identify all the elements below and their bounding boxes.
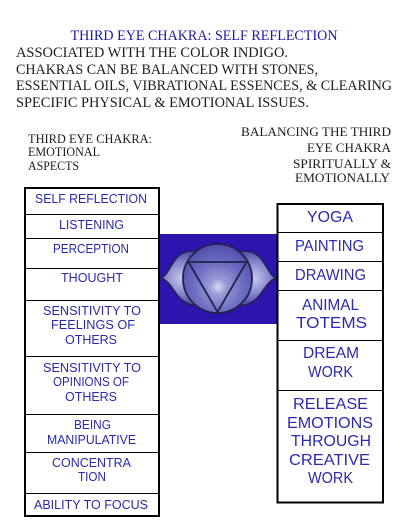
table labels: OTHERS [65,390,117,404]
heading: balancing the third eye chakra: EMOTIONALLY [295,170,391,185]
table labels: RELEASE [293,396,368,413]
indigo panel with third eye chakra symbol [160,234,277,324]
heading: emotional aspects: ASPECTS [28,159,79,173]
heading: balancing the third eye chakra: BALANCING THE THIRD [241,124,391,139]
table labels: WORK [308,470,353,487]
intro text block [16,45,392,111]
icon: left petal [161,251,203,305]
table labels: FEELINGS OF [51,318,135,332]
icon: right petal [234,251,276,305]
heading: balancing the third eye chakra: EYE CHAKRA [307,140,392,155]
icon: central circle [183,244,252,313]
table labels: ABILITY TO FOCUS [34,498,148,512]
table labels: TOTEMS [296,315,367,332]
table labels: PERCEPTION [53,242,129,256]
table labels: SELF REFLECTION [35,192,147,206]
table labels: TION [78,470,106,484]
title: THIRD EYE CHAKRA: SELF REFLECTION [70,28,338,44]
table labels: MANIPULATIVE [47,433,136,447]
heading: balancing the third eye chakra [241,124,392,185]
table labels: OPINIONS OF [53,375,129,389]
table labels: OTHERS [65,333,117,347]
table frame and rows [277,204,383,502]
table labels: DRAWING [295,267,366,284]
table labels: SENSITIVITY TO [43,361,141,375]
heading: emotional aspects [28,132,152,173]
intro text block: ASSOCIATED WITH THE COLOR INDIGO. [16,45,288,61]
table labels: SENSITIVITY TO [43,304,141,318]
table labels: YOGA [307,209,353,226]
table labels: WORK [308,364,353,381]
table frame and rows [25,188,159,516]
heading: emotional aspects: EMOTIONAL [28,145,100,159]
table labels: ANIMAL [302,297,359,314]
heading: emotional aspects: THIRD EYE CHAKRA: [28,132,152,146]
intro text block: CHAKRAS CAN BE BALANCED WITH STONES, [16,62,318,78]
table labels [287,209,373,487]
panel: balancing practices table [277,204,383,502]
heading: balancing the third eye chakra: SPIRITUALLY & [293,156,391,171]
table labels: DREAM [303,345,359,362]
icon: inverted triangle [188,262,246,312]
table labels: PAINTING [295,238,364,255]
table labels: LISTENING [59,218,124,232]
table labels: EMOTIONS [287,415,373,432]
table labels: THROUGH [291,433,371,450]
panel: emotional aspects table [25,188,159,516]
intro text block: SPECIFIC PHYSICAL & EMOTIONAL ISSUES. [16,95,309,111]
table labels: BEING [74,418,111,432]
intro text block: ESSENTIAL OILS, VIBRATIONAL ESSENCES, & CLEARING [16,78,392,94]
table labels: CREATIVE [289,452,370,469]
indigo background [160,234,277,324]
table labels [34,192,148,512]
table labels: THOUGHT [61,271,123,285]
table labels: CONCENTRA [52,456,132,470]
